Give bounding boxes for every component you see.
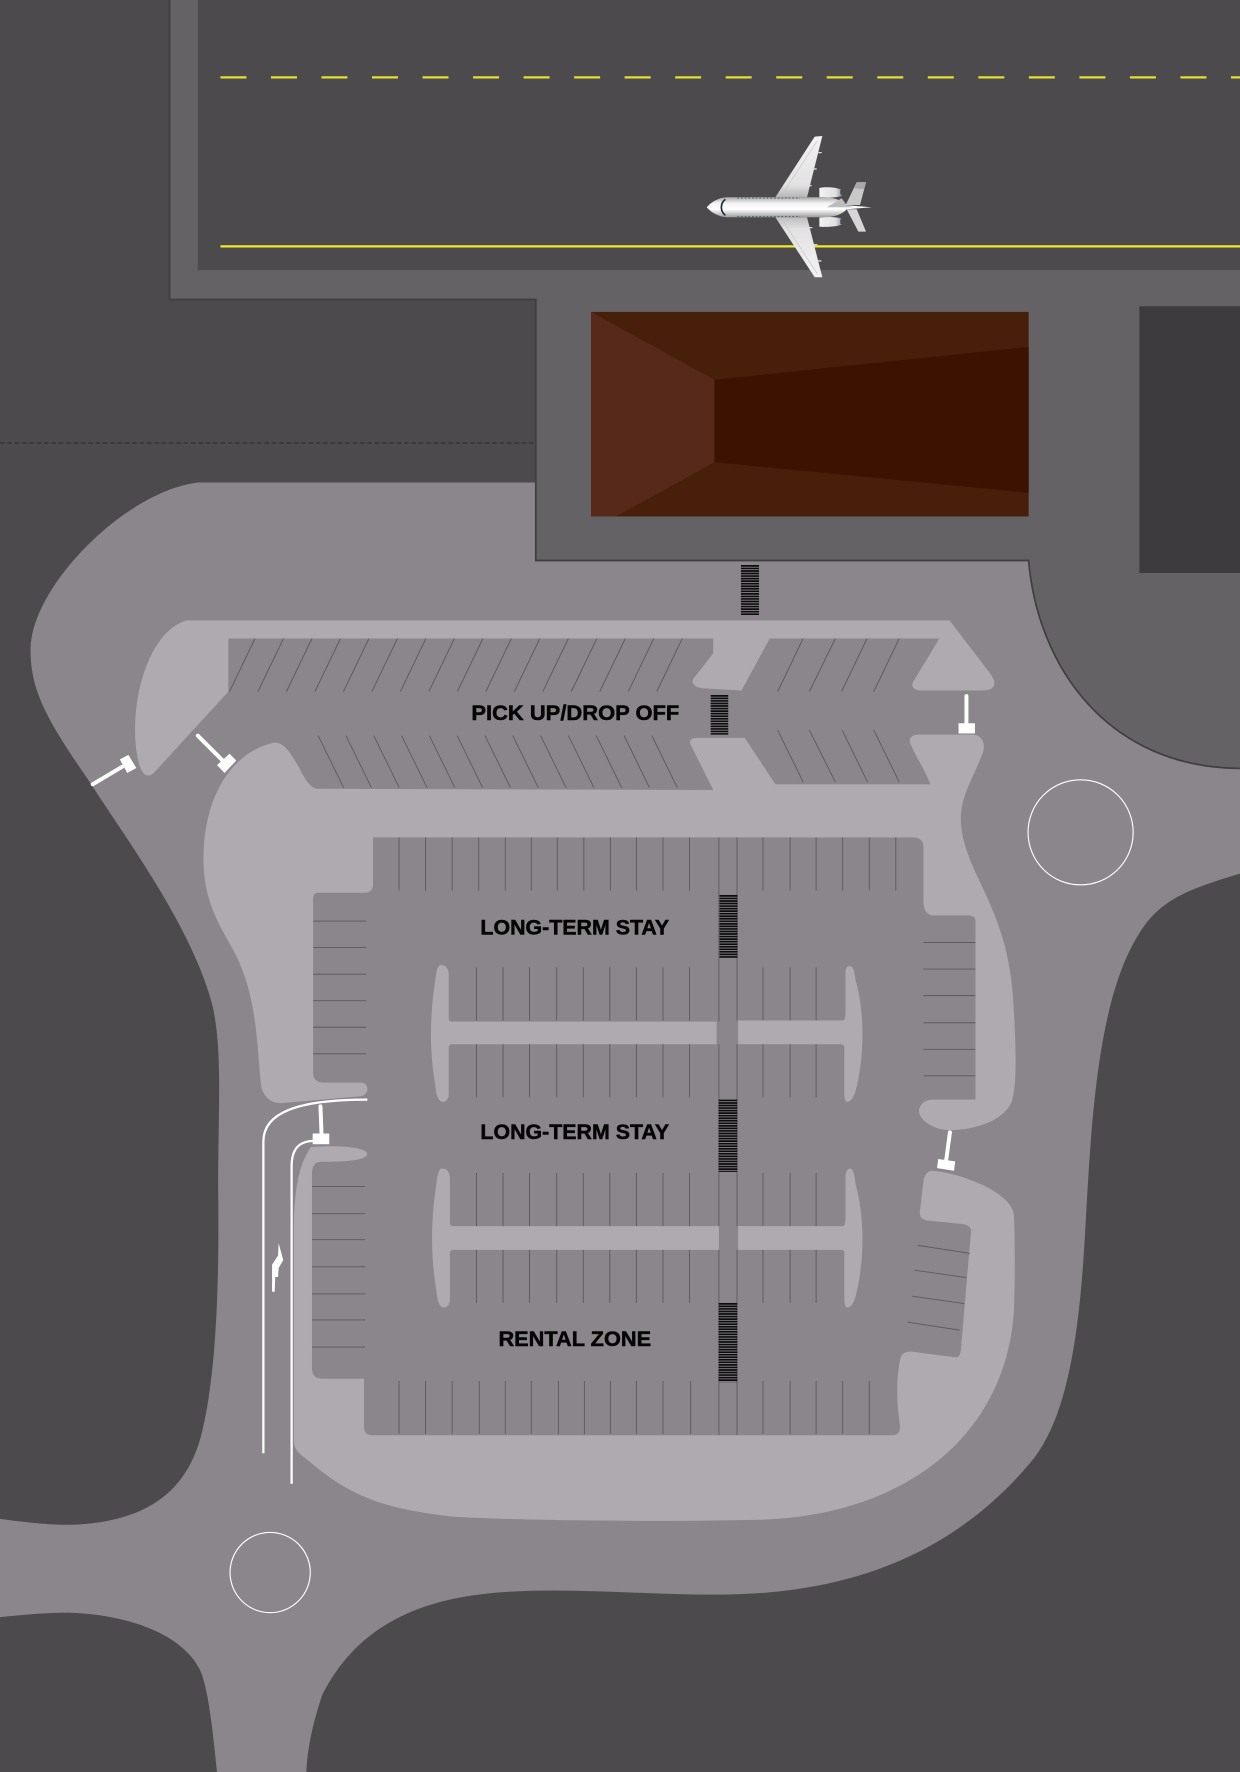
tail root — [827, 198, 853, 207]
top row bays — [399, 837, 896, 891]
access road network — [0, 483, 1240, 1772]
parking bay lines — [229, 639, 975, 1435]
gate icon: far left — [93, 755, 136, 784]
adjacent building — [1139, 306, 1240, 573]
bottom row bays — [399, 1381, 869, 1434]
road lane lines — [263, 1100, 367, 1484]
dashed boundary line — [0, 442, 536, 444]
runway — [198, 0, 1240, 270]
runway centre dashes — [220, 76, 1240, 78]
roundabout: bottom — [230, 1532, 310, 1613]
roundabout: right — [1028, 780, 1133, 885]
fuselage — [707, 197, 872, 217]
crosswalk: terminal — [742, 565, 758, 616]
windscreen — [721, 199, 725, 215]
runway edge line — [220, 245, 1240, 247]
crosswalk: long-term upper — [721, 895, 737, 958]
tail fins — [846, 182, 866, 232]
gate icon: left — [198, 736, 236, 773]
airport apron — [170, 0, 1240, 768]
heading: pick up/drop off: PICK UP/DROP OFF — [471, 701, 679, 725]
gate icon: entrance — [313, 1106, 329, 1144]
parking island: upper right — [738, 966, 862, 1102]
gate icon: top right — [959, 696, 975, 733]
cabin windows — [737, 198, 800, 216]
left bays — [312, 921, 366, 1347]
parking island: upper left — [431, 965, 717, 1102]
crosswalk: pick up lane — [712, 695, 727, 735]
parking island: lower right — [738, 1169, 862, 1308]
parking island: lower left — [432, 1169, 719, 1308]
lower wing — [775, 217, 822, 277]
car park upper surround — [203, 735, 1016, 1130]
upper wing — [775, 136, 822, 197]
lower island bays — [476, 1173, 816, 1303]
heading: long-term stay upper: LONG-TERM STAY — [480, 916, 669, 940]
terminal building roof — [591, 312, 1029, 516]
right bays — [908, 943, 975, 1330]
engines — [819, 187, 843, 227]
crosswalk: rental zone — [720, 1303, 736, 1382]
pick up lower bays — [318, 730, 899, 788]
car park lower surround — [294, 1146, 1015, 1521]
upper island bays — [476, 967, 816, 1097]
crosswalk: long-term middle — [720, 1100, 736, 1172]
pick up/drop off upper kerb — [135, 620, 994, 776]
heading: long-term stay lower: LONG-TERM STAY — [480, 1120, 669, 1144]
gate icon: right — [937, 1132, 955, 1171]
road direction arrow — [272, 1243, 283, 1292]
heading: rental zone: RENTAL ZONE — [498, 1327, 651, 1351]
pick up upper bays — [229, 639, 899, 692]
airplane — [707, 136, 872, 277]
central walkway edges — [719, 837, 737, 1435]
